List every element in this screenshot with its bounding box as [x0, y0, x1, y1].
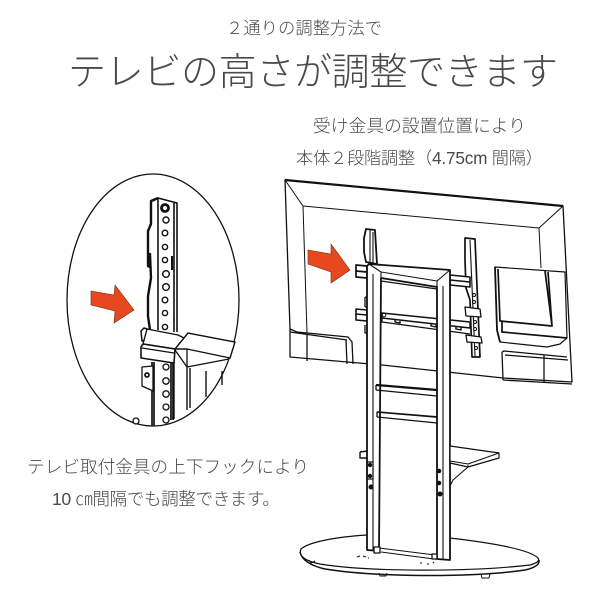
text: bracket position line 2: 本体２段階調整（4.75cm 間隔）: [296, 148, 543, 168]
stand frame: [367, 264, 450, 560]
text: hook adjustment line 1: テレビ取付金具の上下フックにより: [27, 457, 309, 477]
text: bracket position line 1: 受け金具の設置位置により: [313, 116, 526, 136]
shelf: [360, 446, 499, 496]
subtitle: ２通りの調整方法で: [226, 18, 382, 38]
detail circle: hook close-up: [67, 174, 239, 426]
arrow: TV bracket: [308, 244, 350, 283]
base plate: [300, 535, 539, 578]
text: hook adjustment line 2: 10 ㎝間隔でも調整できます。: [52, 489, 280, 509]
mounting brackets: [356, 229, 482, 357]
arrow: left detail: [91, 285, 134, 323]
TV back and stand: [285, 180, 572, 578]
title: テレビの高さが調整できます: [68, 52, 558, 94]
TV body: [285, 180, 572, 384]
